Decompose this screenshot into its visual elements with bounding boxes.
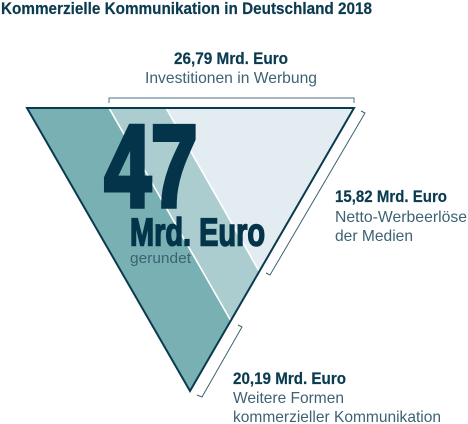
label: Netto-Werbeerlöse: der Medien bbox=[335, 228, 413, 245]
big number: gerundet bbox=[130, 250, 192, 267]
separator lines bbox=[109, 108, 259, 321]
bracket: right upper bbox=[266, 111, 365, 275]
triangle outline bbox=[27, 108, 354, 391]
segment: light remainder bbox=[166, 108, 354, 271]
label: Netto-Werbeerlöse bbox=[335, 188, 467, 245]
label: Weitere Formen: 20,19 Mrd. Euro bbox=[233, 370, 346, 388]
bracket: right lower bbox=[197, 325, 242, 397]
label: Weitere Formen: Weitere Formen bbox=[233, 390, 344, 407]
label: Investitionen in Werbung bbox=[145, 50, 317, 87]
label: Investitionen in Werbung: 26,79 Mrd. Euro bbox=[174, 50, 288, 68]
bracket: top bbox=[109, 98, 354, 103]
big number: 47 bbox=[104, 102, 198, 232]
title: Kommerzielle Kommunikation in Deutschland 2018 bbox=[1, 0, 372, 18]
big number: Mrd. Euro bbox=[130, 211, 265, 254]
label: Weitere Formen bbox=[233, 370, 441, 424]
inverted triangle chart bbox=[27, 108, 354, 391]
label: Netto-Werbeerlöse: Netto-Werbeerlöse bbox=[335, 209, 467, 226]
label: Investitionen in Werbung: Investitionen in Werbung bbox=[145, 70, 317, 87]
label: Netto-Werbeerlöse: 15,82 Mrd. Euro bbox=[335, 188, 447, 206]
segment: Weitere Formen bbox=[27, 108, 231, 391]
big number bbox=[104, 102, 265, 267]
segment: Netto-Werbeerlöse overlap bbox=[109, 108, 259, 321]
